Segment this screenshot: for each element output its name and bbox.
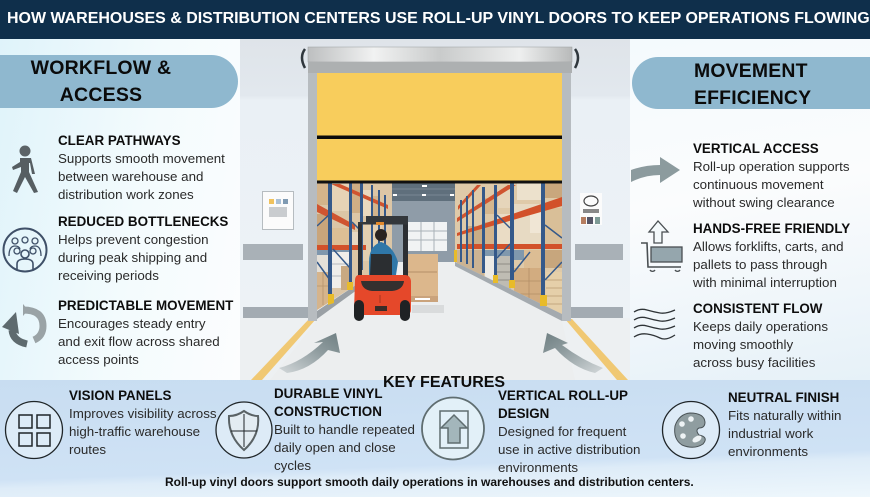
right rack bbox=[454, 183, 562, 321]
text: vision panels bbox=[69, 388, 217, 457]
text: hands-free friendly: HANDS-FREE FRIENDLY bbox=[693, 221, 850, 236]
icon: cart with up arrow bbox=[641, 220, 683, 272]
text: clear pathways bbox=[58, 133, 225, 202]
panel: key features band bbox=[0, 380, 870, 497]
icon: palette bbox=[662, 400, 720, 460]
text: neutral finish: Fits naturally within bbox=[728, 408, 841, 423]
icon: right arrow bbox=[631, 157, 680, 183]
text: vertical roll-up design: VERTICAL ROLL-UP bbox=[498, 388, 628, 403]
text: consistent flow: moving smoothly bbox=[693, 337, 793, 352]
text: vertical roll-up design: environments bbox=[498, 460, 578, 475]
heading pill: workflow & access: ACCESS bbox=[60, 84, 142, 106]
left rack bbox=[317, 183, 394, 319]
text: vertical access bbox=[693, 141, 850, 210]
heading pill: workflow & access bbox=[0, 55, 238, 108]
text: neutral finish: industrial work bbox=[728, 426, 813, 441]
text: reduced bottlenecks: Helps prevent congestion bbox=[58, 232, 209, 247]
text: vertical access: Roll-up operation supports bbox=[693, 159, 850, 174]
icon: crowd bbox=[2, 228, 48, 272]
text: reduced bottlenecks: during peak shipping and bbox=[58, 250, 207, 265]
text: clear pathways: between warehouse and bbox=[58, 169, 203, 184]
text: vertical access: without swing clearance bbox=[693, 195, 835, 210]
text: clear pathways: CLEAR PATHWAYS bbox=[58, 133, 181, 148]
text: predictable movement bbox=[58, 298, 234, 367]
illustration: warehouse roll-up door scene bbox=[240, 39, 630, 380]
text: clear pathways: distribution work zones bbox=[58, 187, 194, 202]
icon: vision panels bbox=[4, 400, 64, 460]
icon: cycle arrows bbox=[2, 304, 46, 348]
text: vision panels: VISION PANELS bbox=[69, 388, 171, 403]
text: reduced bottlenecks: receiving periods bbox=[58, 268, 159, 283]
poster left bbox=[262, 192, 294, 230]
floor bbox=[270, 262, 575, 380]
title banner bbox=[0, 0, 870, 39]
heading pill: workflow & access: WORKFLOW & bbox=[31, 57, 171, 79]
pallet boxes bbox=[406, 254, 444, 313]
far warehouse interior bbox=[380, 183, 470, 263]
panel: right background bbox=[630, 39, 870, 380]
text: hands-free friendly: with minimal interruption bbox=[693, 275, 837, 290]
arrow: floor left bbox=[279, 333, 340, 373]
text: neutral finish: NEUTRAL FINISH bbox=[728, 390, 839, 405]
text: neutral finish bbox=[728, 390, 841, 459]
heading pill: movement efficiency bbox=[632, 57, 870, 109]
door frame and rolled vinyl curtain bbox=[302, 47, 578, 321]
text: vision panels: routes bbox=[69, 442, 106, 457]
text: vertical roll-up design bbox=[498, 388, 640, 475]
icon: shield bbox=[215, 401, 273, 459]
text: neutral finish: environments bbox=[728, 444, 808, 459]
text: consistent flow: CONSISTENT FLOW bbox=[693, 301, 822, 316]
text: vertical roll-up design: use in active distribution bbox=[498, 442, 640, 457]
key features heading: KEY FEATURES bbox=[383, 374, 505, 391]
text: reduced bottlenecks bbox=[58, 214, 228, 283]
title banner: HOW WAREHOUSES & DISTRIBUTION CENTERS USE ROLL-UP VINYL DOORS TO KEEP OPERATIONS FLOWING bbox=[7, 10, 870, 27]
text: vertical roll-up design: DESIGN bbox=[498, 406, 549, 421]
text: vision panels: high-traffic warehouse bbox=[69, 424, 200, 439]
text: durable vinyl construction: cycles bbox=[274, 458, 311, 473]
text: vertical access: VERTICAL ACCESS bbox=[693, 141, 819, 156]
text: clear pathways: Supports smooth movement bbox=[58, 151, 225, 166]
panel: left background bbox=[0, 39, 240, 380]
text: vision panels: Improves visibility across bbox=[69, 406, 217, 421]
text: hands-free friendly bbox=[693, 221, 850, 290]
text: durable vinyl construction: daily open and close bbox=[274, 440, 396, 455]
text: predictable movement: Encourages steady entry bbox=[58, 316, 206, 331]
text: hands-free friendly: pallets to pass through bbox=[693, 257, 827, 272]
text: reduced bottlenecks: REDUCED BOTTLENECKS bbox=[58, 214, 228, 229]
text: predictable movement: and exit flow across shared bbox=[58, 334, 220, 349]
icon: waves bbox=[634, 308, 676, 340]
text: consistent flow: across busy facilities bbox=[693, 355, 815, 370]
text: consistent flow bbox=[693, 301, 828, 370]
arrow: floor right bbox=[543, 333, 603, 373]
text: predictable movement: PREDICTABLE MOVEMENT bbox=[58, 298, 233, 313]
poster right bbox=[580, 193, 602, 225]
forklift with driver bbox=[354, 216, 411, 321]
text: vertical roll-up design: Designed for frequent bbox=[498, 424, 626, 439]
icon: vertical roll-up arrow bbox=[421, 396, 485, 460]
heading pill: movement efficiency: EFFICIENCY bbox=[694, 87, 811, 109]
text: durable vinyl construction bbox=[274, 386, 415, 473]
text: consistent flow: Keeps daily operations bbox=[693, 319, 828, 334]
heading pill: movement efficiency: MOVEMENT bbox=[694, 60, 808, 82]
text: predictable movement: access points bbox=[58, 352, 139, 367]
text: durable vinyl construction: Built to handle repeated bbox=[274, 422, 415, 437]
text: durable vinyl construction: CONSTRUCTION bbox=[274, 404, 382, 419]
text: hands-free friendly: Allows forklifts, carts, and bbox=[693, 239, 844, 254]
text: vertical access: continuous movement bbox=[693, 177, 824, 192]
footer statement: Roll-up vinyl doors support smooth daily operations in warehouses and distribution centers. bbox=[165, 475, 694, 489]
icon: walking person bbox=[12, 146, 38, 193]
text: durable vinyl construction: DURABLE VINYL bbox=[274, 386, 383, 401]
